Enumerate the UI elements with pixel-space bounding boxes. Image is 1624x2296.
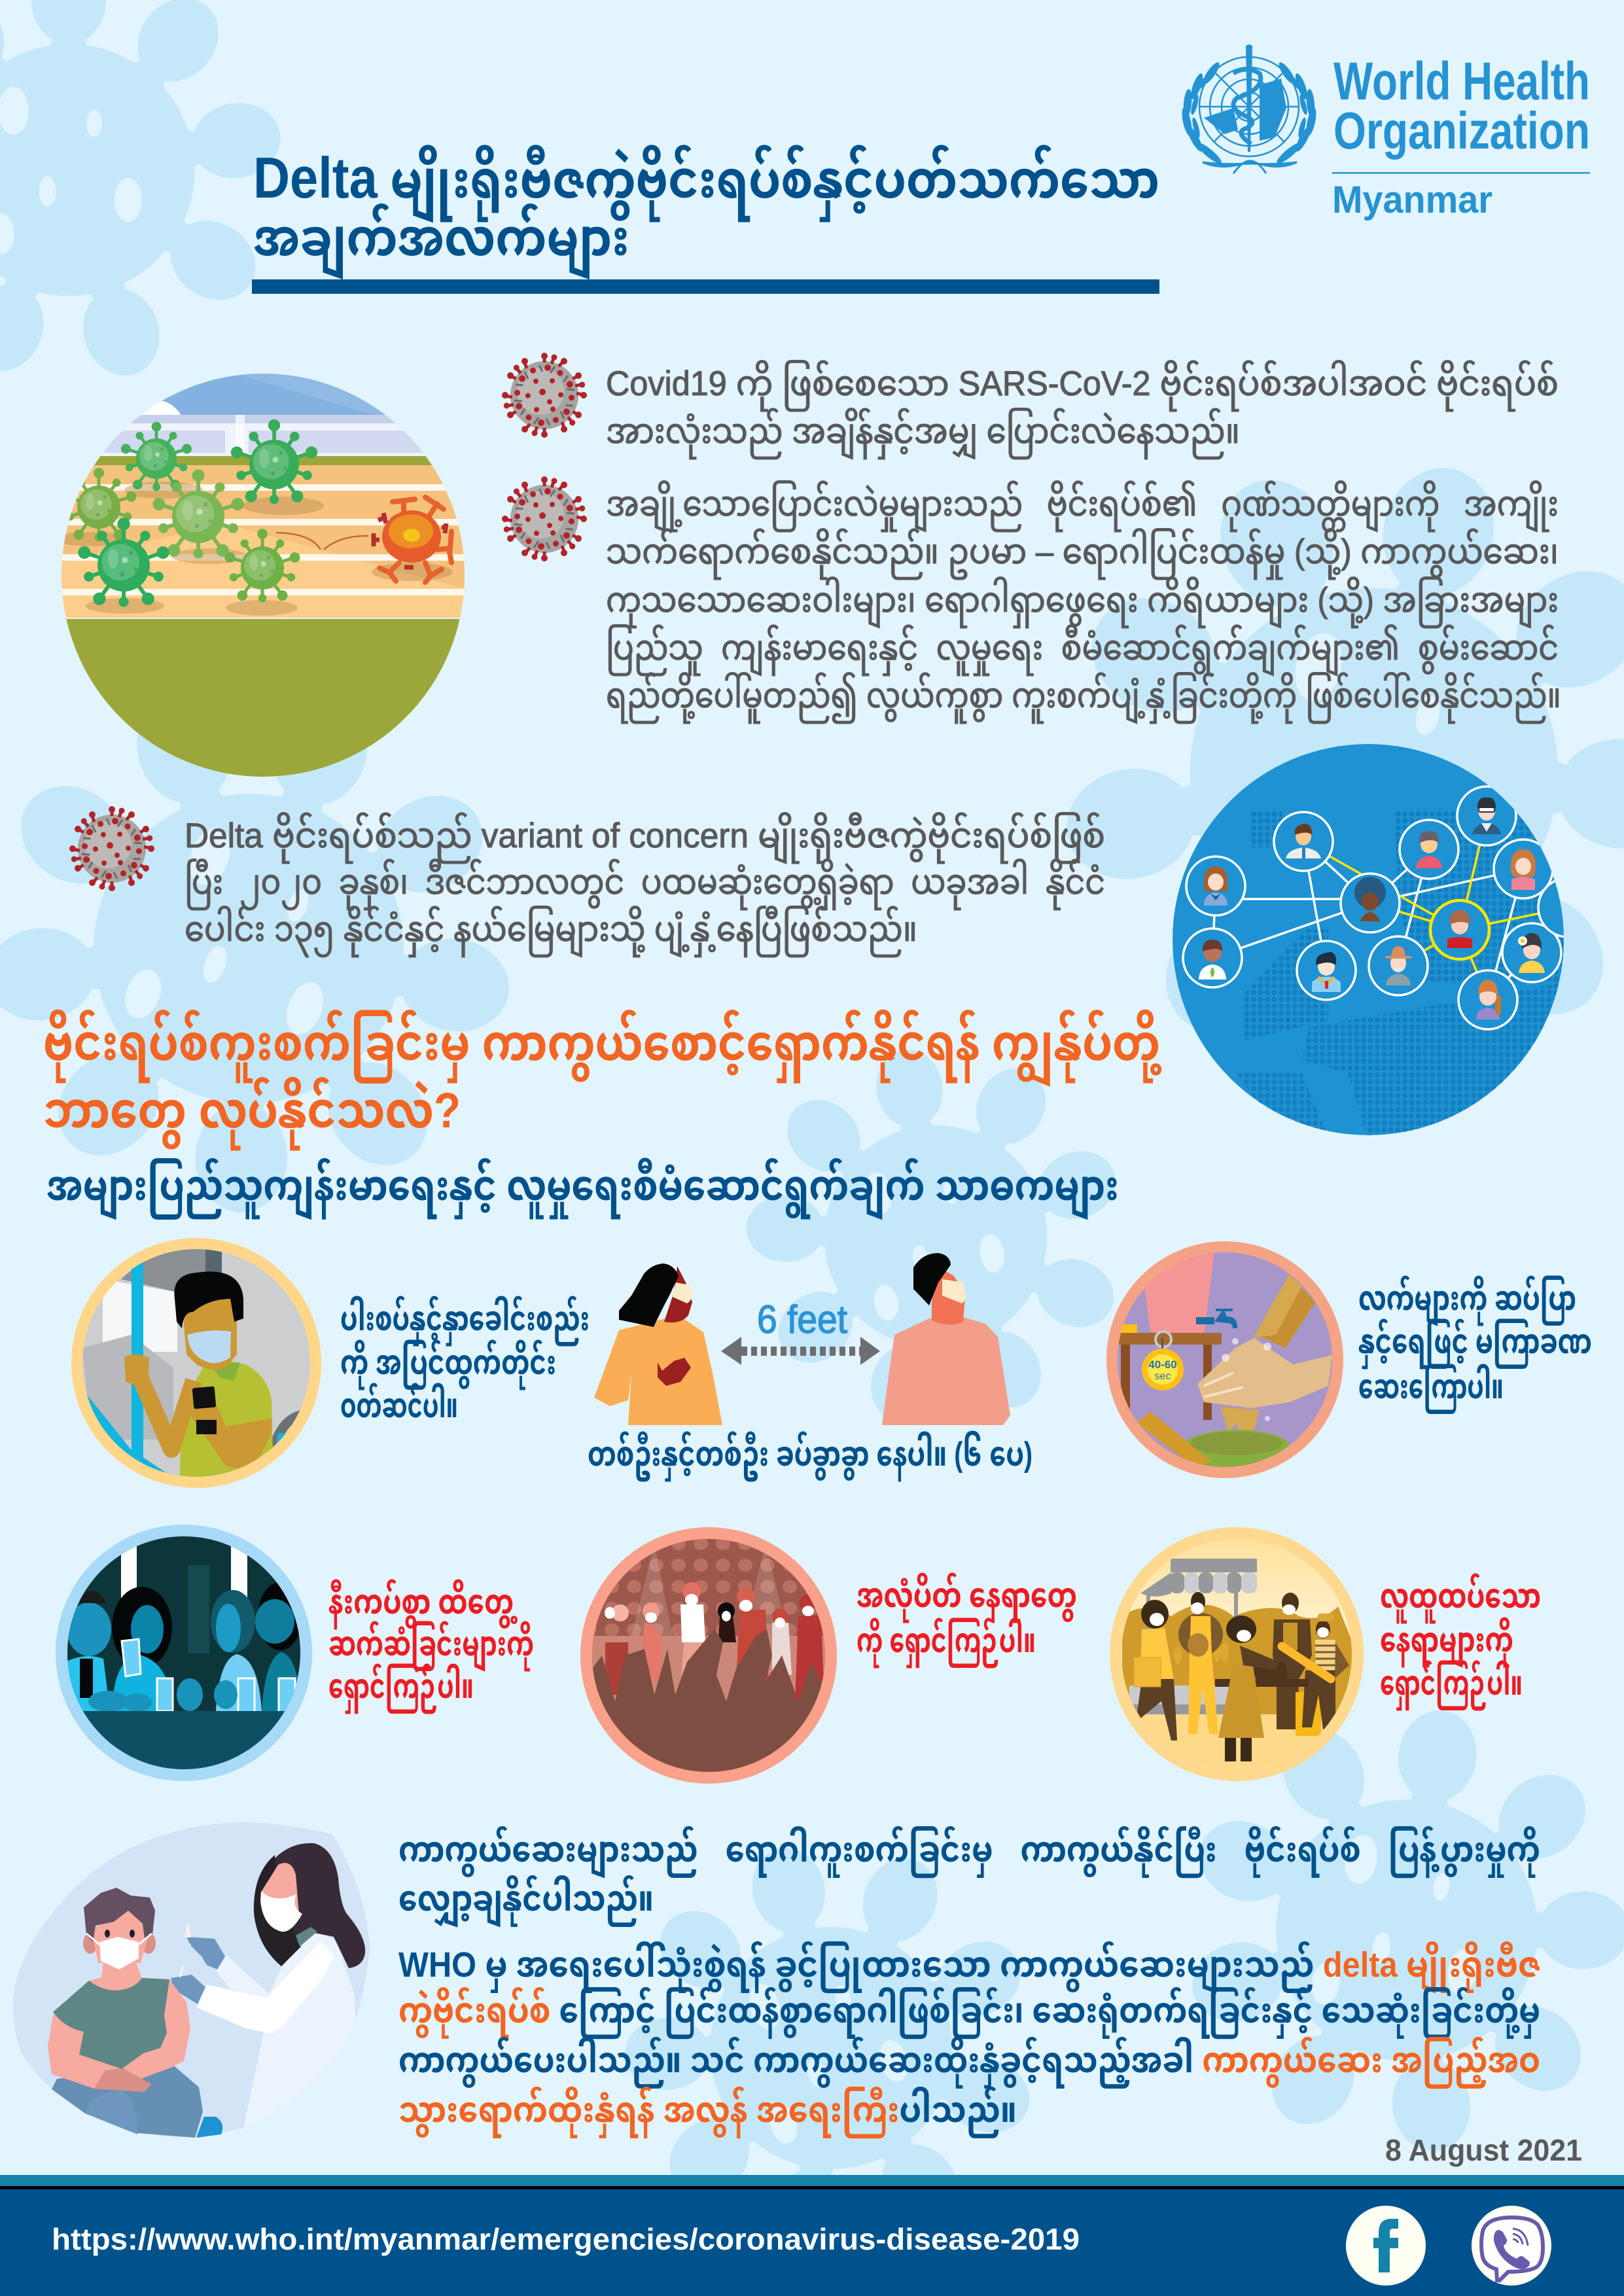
left woman [1136, 1679, 1177, 1740]
text: wear mask: ပါးစပ်နှင့်နှာခေါင်းစည်း [340, 1296, 590, 1346]
illustration: man [882, 1253, 1010, 1425]
right man [1302, 1670, 1335, 1729]
paragraph: vaccines reduce spread [398, 1826, 1540, 1928]
connection lines [1212, 861, 1564, 978]
date: 8 August 2021 [1385, 2133, 1582, 2167]
illustration: vaccination [13, 1822, 370, 2138]
illustration: hand washing: 40-60 [1148, 1358, 1177, 1371]
heading: what can we do: ဗိုင်းရပ်စ်ကူးစက်ခြင်းမှ ကာကွယ်စောင့်ရှောက်နိုင်ရန် ကျွန်ုပ်တို့ [43, 1010, 1162, 1087]
text: avoid close contact: နီးကပ်စွာ ထိတွေ့ [328, 1579, 518, 1629]
footer url: https://www.who.int/myanmar/emergencies/coronavirus-disease-2019 [52, 2222, 1080, 2256]
bullet: virus icon 1 [496, 353, 593, 438]
market produce [1174, 1642, 1229, 1664]
person 1 [68, 1656, 107, 1711]
paragraph: delta variant of concern: ပြီး ၂၀၂၀ ခုနှစ်၊ ဒီဇင်ဘာလတွင် ပထမဆုံးတွေ့ရှိခဲ့ရာ ယခုအခါ နိုင်ငံ [185, 858, 1105, 910]
paragraph: effects of changes [606, 480, 1561, 724]
text: avoid closed spaces [856, 1572, 1077, 1668]
person 4 [258, 1582, 302, 1650]
people nodes [1183, 786, 1597, 1029]
paragraph: WHO authorised vaccines: သွားရောက်ထိုးနှံရန် အလွန် အရေးကြီးပါသည်။ [398, 2086, 1017, 2138]
icon: green viruses [60, 419, 319, 608]
arrow: double headed distance [721, 1337, 880, 1365]
table [1215, 1679, 1309, 1687]
text: wash hands: ဆေးကြောပါ။ [1358, 1364, 1504, 1414]
organisation name: Myanmar [1332, 179, 1492, 221]
text: avoid crowded places: နေရာများကို [1380, 1617, 1513, 1669]
paragraph: all viruses change: Covid19 ကို ဖြစ်စေသော SARS-CoV-2 ဗိုင်းရပ်စ်အပါအဝင် ဗိုင်းရပ်စ် [606, 360, 1559, 412]
paragraph: vaccines reduce spread: လျှော့ချနိုင်ပါသည်။ [398, 1875, 654, 1928]
footer band [0, 2175, 1624, 2296]
text: avoid close contact [328, 1579, 534, 1714]
text: avoid closed spaces: အလုံပိတ် နေရာတွေ [856, 1572, 1077, 1623]
paragraph: delta variant of concern: ပေါင်း ၁၃၅ နိုင်ငံနှင့် နယ်မြေများသို့ ပျံ့နှံ့နေပြီဖြစ်သည်။ [185, 906, 917, 958]
shadows [56, 482, 453, 616]
text: avoid closed spaces: ကို ရှောင်ကြဉ်ပါ။ [856, 1617, 1036, 1668]
title [253, 144, 1159, 280]
title: Delta မျိုးရိုးဗီဇကွဲဗိုင်းရပ်စ်နှင့်ပတ်သက်သော [253, 144, 1159, 223]
icon: facebook [1346, 2206, 1426, 2286]
illustration: close contact in restaurant [56, 1525, 312, 1781]
paragraph: effects of changes: ကုသသောဆေးဝါးများ၊ ရောဂါရှာဖွေရေး ကိရိယာများ (သို့) အခြားအများ [606, 577, 1559, 629]
paragraph: all viruses change: အားလုံးသည် အချိန်နှင့်အမျှ ပြောင်းလဲနေသည်။ [606, 408, 1240, 460]
bullet: virus icon 3 [63, 806, 160, 891]
text: keep distance: တစ်ဦးနှင့်တစ်ဦး ခပ်ခွာခွာ နေပါ။ (၆ ပေ) [588, 1430, 1033, 1481]
illustration: hand washing [1106, 1241, 1343, 1479]
illustration: masked man on bus [71, 1238, 321, 1488]
title underline bar [252, 279, 1159, 294]
illustration: hand washing: sec [1155, 1371, 1171, 1382]
dotted world map [1237, 811, 1570, 1139]
illustration: crowded market [1110, 1527, 1364, 1781]
paragraph: WHO authorised vaccines: ကာကွယ်ပေးပါသည်။ သင် ကာကွယ်ဆေးထိုးနှံခွင့်ရသည့်အခါ ကာကွယ်ဆေး အပြည့်အဝ [398, 2036, 1540, 2089]
heading: what can we do: ဘာတွေ လုပ်နိုင်သလဲ? [43, 1077, 461, 1150]
awning [1171, 1559, 1257, 1572]
overalls man [1178, 1613, 1223, 1656]
WHO logo [1180, 44, 1590, 221]
icon: WHO emblem [1180, 44, 1318, 173]
label: 6 feet: 6 feet [757, 1298, 847, 1341]
paragraph: all viruses change [606, 360, 1559, 460]
back man [1273, 1619, 1312, 1729]
organisation name [1332, 52, 1590, 221]
bullet: virus icon 2 [496, 476, 593, 561]
text: avoid crowded places: ရှောင်ကြဉ်ပါ။ [1380, 1660, 1523, 1710]
paragraph: delta variant of concern [185, 812, 1105, 958]
illustration: viruses racing on track [56, 374, 465, 783]
icon: orange delta virus [373, 497, 451, 582]
sub-heading: public health measures: အများပြည်သူကျန်းမာရေးနှင့် လူမှုရေးစီမံဆောင်ရွက်ချက် သာဓကများ [46, 1157, 1119, 1220]
text: avoid crowded places [1380, 1573, 1541, 1710]
icon: viber [1472, 2206, 1551, 2286]
text: wash hands [1358, 1275, 1592, 1414]
text: wear mask: ဝတ်ဆင်ပါ။ [340, 1383, 458, 1425]
centre woman [1225, 1734, 1236, 1761]
bucket [1296, 1692, 1321, 1736]
heading: what can we do [43, 1010, 1162, 1150]
title: အချက်အလက်များ [253, 203, 629, 280]
person 2 [112, 1587, 172, 1668]
person 3 [211, 1590, 255, 1653]
paragraph: effects of changes: သက်ရောက်စေနိုင်သည်။ ဥပမာ – ရောဂါပြင်းထန်မှု (သို့) ကာကွယ်ဆေး၊ [606, 528, 1559, 580]
text: wear mask [340, 1296, 590, 1425]
paragraph: delta variant of concern: Delta ဗိုင်းရပ်စ်သည် variant of concern မျိုးရိုးဗီဇကွဲဗိုင်းရပ်စ်ဖြစ် [185, 812, 1105, 864]
text: avoid close contact: ဆက်ဆံခြင်းများကို [328, 1621, 534, 1672]
illustration: woman [594, 1263, 722, 1425]
paragraph: WHO authorised vaccines: WHO မှ အရေးပေါ်သုံးစွဲရန် ခွင့်ပြုထားသော ကာကွယ်ဆေးများသည် delta မျိုးရိုးဗီဇ [398, 1941, 1540, 1994]
text: avoid close contact: ရှောင်ကြဉ်ပါ။ [328, 1663, 474, 1714]
text: avoid crowded places: လူထူထပ်သော [1380, 1573, 1541, 1623]
illustration: crowded closed space party [580, 1527, 837, 1784]
man [180, 1360, 274, 1480]
motion trail [276, 533, 368, 550]
illustration: contact network globe [1173, 744, 1597, 1139]
nurse [171, 1843, 365, 2034]
paragraph: WHO authorised vaccines [398, 1941, 1540, 2138]
patient [48, 1888, 222, 2138]
text: wear mask: ကို အပြင်ထွက်တိုင်း [340, 1339, 556, 1390]
